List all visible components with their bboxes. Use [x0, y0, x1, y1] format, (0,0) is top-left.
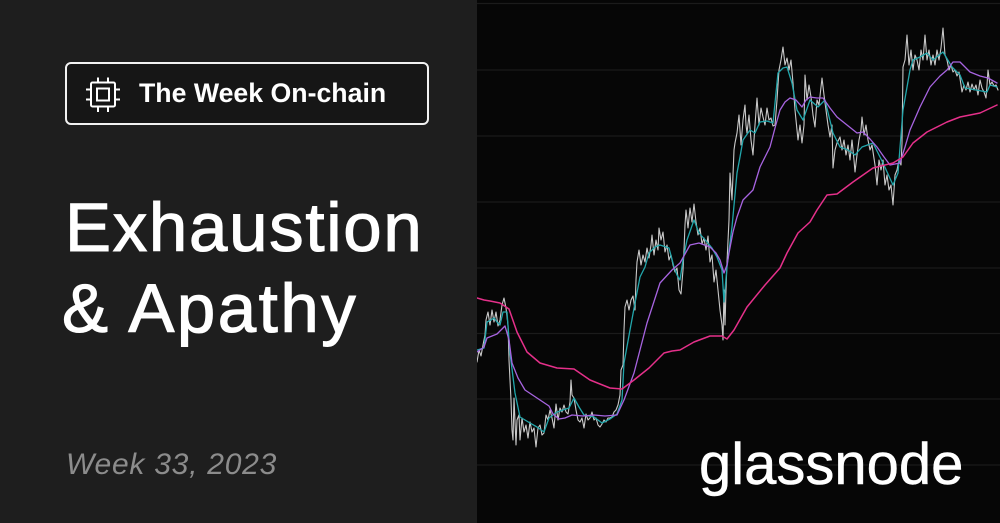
heading line 2: & Apathy — [62, 270, 358, 347]
teal moving average — [477, 52, 997, 432]
heading line 1: Exhaustion — [65, 189, 423, 266]
badge: The Week On-chain — [64, 62, 428, 124]
panel: title panel — [0, 0, 477, 523]
logo: glassnode: glassnode — [699, 432, 963, 497]
chart: price with moving averages — [477, 3, 1000, 466]
badge label: The Week On-chain — [139, 78, 386, 108]
purple moving average — [477, 62, 997, 419]
icon: chip — [86, 78, 120, 112]
pink moving average — [477, 105, 997, 389]
white price line — [477, 28, 998, 447]
date text: Week 33, 2023 — [66, 448, 277, 481]
